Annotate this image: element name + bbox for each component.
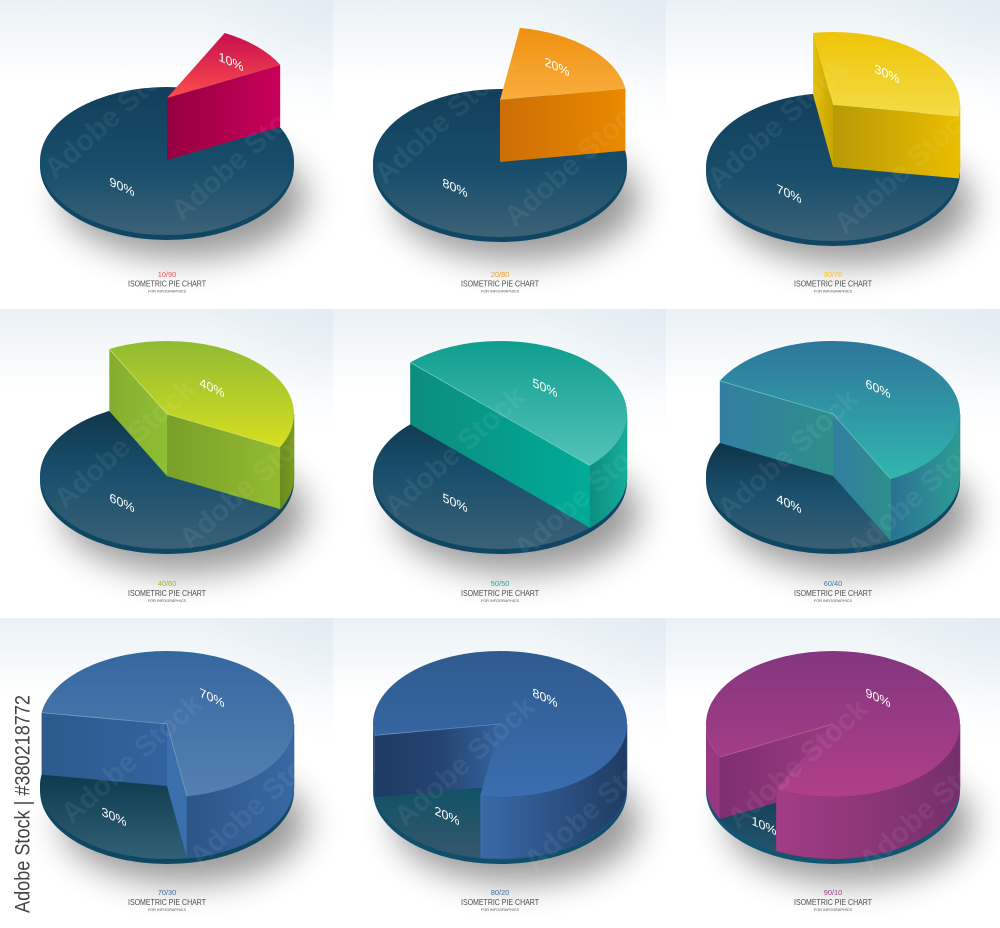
90% slice cut wall (720, 724, 833, 819)
30% slice outer wall (958, 105, 960, 178)
10% floor slice (720, 786, 833, 851)
caption ratio: 30/70 (824, 270, 842, 279)
label 30%: 30% (874, 61, 900, 87)
vertical stock id text: Adobe Stock | #380218772 (12, 695, 34, 913)
watermarks: Adobe Stock (48, 372, 202, 515)
shadow (62, 453, 306, 573)
watermarks: Adobe Stock (721, 692, 875, 835)
70% slice right wall (167, 724, 187, 858)
watermarks: Adobe (673, 321, 762, 405)
label 20%: 20% (434, 803, 460, 829)
label upper 50%: 50% (532, 375, 558, 401)
base edge (373, 718, 627, 864)
label lower 50%: 50% (442, 490, 468, 516)
watermarks: Adobe Stock (518, 734, 672, 877)
50% slice cut wall (410, 362, 590, 528)
80% slice cut wall (375, 724, 500, 797)
caption subtitle: FOR INFOGRAPHICS (814, 599, 852, 603)
caption title: ISOMETRIC PIE CHART (794, 280, 872, 288)
shadow (62, 138, 306, 258)
chart: 40/60 (40, 341, 306, 603)
watermarks: Adobe (3, 301, 92, 385)
90% slice left outer wall (706, 724, 720, 819)
base edge (40, 92, 294, 240)
70% base slice (706, 93, 960, 241)
base edge (706, 408, 960, 554)
caption subtitle: FOR INFOGRAPHICS (481, 290, 519, 294)
cut edge highlight (720, 724, 833, 757)
caption title: ISOMETRIC PIE CHART (128, 280, 206, 288)
cut edge highlights (42, 713, 187, 796)
20% slice top (500, 28, 625, 100)
80% slice top (373, 651, 627, 797)
caption title: ISOMETRIC PIE CHART (128, 589, 206, 598)
label 70%: 70% (199, 685, 225, 711)
shadow (728, 453, 972, 573)
80% slice outer wall (480, 724, 627, 859)
caption title: ISOMETRIC PIE CHART (128, 898, 206, 907)
shadow (728, 144, 972, 264)
label 90%: 90% (109, 174, 135, 200)
label 70%: 70% (776, 181, 802, 207)
caption subtitle: FOR INFOGRAPHICS (148, 908, 186, 912)
40% slice outer wall (280, 414, 294, 509)
chart: 50/50 (373, 341, 639, 603)
60% base slice (40, 403, 294, 549)
base edge (373, 408, 627, 554)
caption ratio: 60/40 (824, 579, 842, 588)
shadow (395, 453, 639, 573)
90% slice outer wall (776, 724, 960, 859)
watermarks: Adobe Stock (183, 730, 337, 873)
30% floor slice (40, 775, 187, 859)
30% slice front wall (833, 105, 958, 178)
caption subtitle: FOR INFOGRAPHICS (814, 908, 852, 912)
70% slice outer wall (187, 724, 294, 858)
base edge (706, 718, 960, 864)
50% slice top (410, 341, 627, 466)
caption title: ISOMETRIC PIE CHART (794, 898, 872, 907)
label 40%: 40% (776, 491, 802, 517)
base top (373, 713, 627, 859)
caption title: ISOMETRIC PIE CHART (461, 589, 539, 598)
caption ratio: 10/90 (158, 270, 176, 279)
40% slice top (109, 341, 294, 447)
caption ratio: 70/30 (158, 888, 176, 897)
20% floor slice (375, 786, 500, 858)
30% slice left wall (813, 33, 833, 167)
label 90%: 90% (865, 685, 891, 711)
caption subtitle: FOR INFOGRAPHICS (481, 908, 519, 912)
50% slice outer wall (590, 414, 627, 528)
caption title: ISOMETRIC PIE CHART (461, 280, 539, 288)
70% slice left wall (42, 713, 167, 786)
base top (40, 713, 294, 859)
base top (706, 713, 960, 859)
50% base slice (373, 403, 627, 549)
40% floor slice (706, 443, 891, 549)
watermarks: Adobe Stock (388, 690, 542, 833)
shadow (728, 763, 972, 883)
90% slice top (706, 651, 960, 797)
label 80%: 80% (442, 175, 468, 201)
80% base slice (373, 89, 627, 237)
chart: 30/70 (706, 32, 972, 293)
60% slice right wall (833, 414, 891, 541)
40% slice left wall (109, 349, 167, 476)
10% slice front wall (167, 65, 280, 160)
watermarks: Adobe Stock (498, 90, 652, 233)
base edge (706, 98, 960, 246)
label 30%: 30% (101, 804, 127, 830)
base edge (40, 408, 294, 554)
60% slice outer wall (891, 414, 960, 541)
label 40%: 40% (199, 375, 225, 401)
watermarks: Adobe Stock (378, 380, 532, 523)
caption subtitle: FOR INFOGRAPHICS (481, 599, 519, 603)
caption subtitle: FOR INFOGRAPHICS (148, 599, 186, 603)
90% base slice (40, 87, 294, 235)
label 20%: 20% (544, 54, 570, 80)
watermarks: Adobe Stock (841, 422, 995, 565)
base top (706, 403, 960, 549)
watermarks: Adobe Stock (368, 47, 522, 190)
caption ratio: 20/80 (491, 270, 509, 279)
watermarks: Adobe Stock (165, 84, 319, 227)
label 60%: 60% (109, 490, 135, 516)
caption ratio: 80/20 (491, 888, 509, 897)
base edge (373, 94, 627, 242)
40% slice front wall (167, 414, 280, 509)
caption title: ISOMETRIC PIE CHART (794, 589, 872, 598)
label 10%: 10% (751, 813, 777, 839)
chart: 60/40 (706, 341, 972, 603)
watermarks: Adobe Stock (173, 412, 327, 555)
watermarks: Adobe Stock (828, 97, 982, 240)
chart: 70/30 (40, 651, 306, 912)
label 80%: 80% (532, 685, 558, 711)
watermarks: Adobe Stock (711, 382, 865, 525)
cut edge highlights (109, 349, 280, 447)
chart: 80/20 (373, 651, 639, 912)
cut edge highlight (375, 724, 500, 735)
caption ratio: 50/50 (491, 579, 509, 588)
watermarks: Adobe Stock (508, 422, 662, 565)
chart: 90/10 (706, 651, 972, 912)
80% slice left outer wall (373, 724, 375, 797)
20% slice front wall (500, 89, 625, 162)
watermarks: Adobe Stock (38, 42, 192, 185)
60% slice top (720, 341, 960, 479)
70% slice top (42, 651, 294, 796)
label 10%: 10% (218, 49, 244, 75)
chart: 20/80 (373, 28, 639, 294)
watermarks: Adobe Stock (701, 52, 855, 195)
cut edge highlights (720, 381, 891, 479)
chart: 10/90 (40, 33, 306, 294)
30% slice top (813, 32, 960, 116)
shadow (395, 140, 639, 260)
label 60%: 60% (865, 376, 891, 402)
shadow (62, 763, 306, 883)
caption title: ISOMETRIC PIE CHART (461, 898, 539, 907)
watermarks: Adobe Stock (55, 687, 209, 830)
caption ratio: 40/60 (158, 579, 176, 588)
caption subtitle: FOR INFOGRAPHICS (814, 290, 852, 294)
60% slice left wall (720, 381, 833, 476)
base edge (40, 718, 294, 864)
shadow (395, 763, 639, 883)
caption ratio: 90/10 (824, 888, 842, 897)
10% slice top (167, 33, 280, 98)
caption subtitle: FOR INFOGRAPHICS (148, 290, 186, 294)
cut edge highlight (410, 362, 590, 466)
